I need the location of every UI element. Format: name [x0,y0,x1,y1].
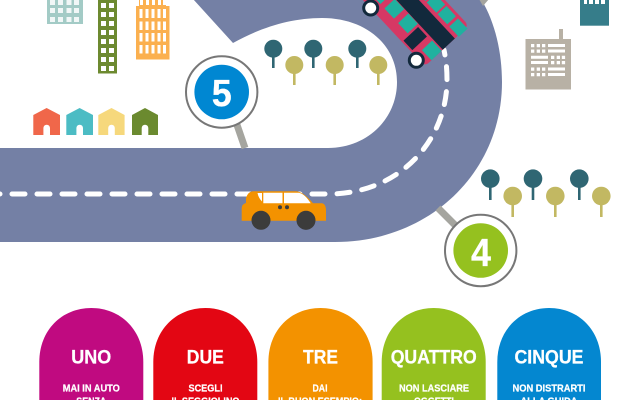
road centre dashes [0,50,447,194]
marker 5 [186,56,257,148]
card: cinque: CINQUE [514,346,584,368]
card: tre [268,308,373,400]
card: due [153,308,257,400]
car windows [258,193,311,203]
building: orange tower [136,0,170,60]
trees: island group [264,40,387,85]
card: uno: MAI IN AUTO [63,384,120,395]
bus rear wheel [364,1,378,15]
marker 4: 4 [471,232,491,275]
house: red [33,108,60,135]
top marker stem [479,0,489,6]
card: uno [39,308,143,400]
card: due: DUE [187,346,224,368]
house: yellow [98,108,125,135]
building: pale teal [47,0,83,24]
car door handles [278,205,289,209]
trees: right group [481,169,611,217]
bus front wheel [409,53,423,67]
bus [339,0,470,68]
marker 5: 5 [212,73,232,115]
card: due: SCEGLI [188,384,223,395]
road [0,0,502,242]
card: quattro: NON LASCIARE [399,384,469,395]
marker 4 [438,208,516,286]
card: cinque [497,308,601,400]
card: quattro [382,308,486,400]
car [242,191,326,230]
building: dark teal [580,0,609,26]
house: teal [66,108,93,135]
card: uno: UNO [71,346,111,368]
card: quattro: QUATTRO [391,346,477,368]
card: cinque: NON DISTRARTI [512,384,586,395]
building: green tower [98,0,117,74]
house: green [132,108,158,135]
bus body and windows [339,0,470,68]
car wheels [252,211,316,230]
card: tre: TRE [303,346,338,368]
card: tre: DAI [312,384,328,395]
car body [242,191,326,221]
building: beige office [526,29,571,90]
